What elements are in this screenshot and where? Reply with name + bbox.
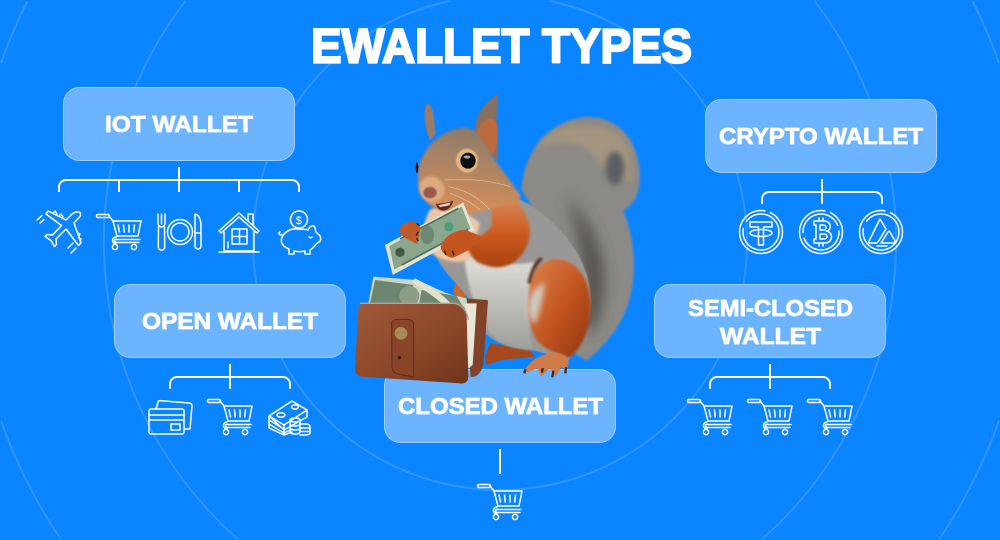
- icon: plate and cutlery: [158, 214, 201, 250]
- squirrel chest and arm: [463, 193, 530, 267]
- squirrel rear arm leg: [453, 277, 468, 303]
- squirrel hind foot: [524, 353, 568, 377]
- icon: shopping cart: [208, 400, 252, 435]
- icon: airplane: [37, 211, 81, 253]
- IoT wallet box: [64, 88, 294, 160]
- crypto wallet connector: [762, 179, 882, 204]
- illustration: squirrel with wallet: [355, 94, 640, 383]
- crypto wallet label: CRYPTO WALLET: [719, 123, 924, 149]
- squirrel body: [424, 193, 591, 360]
- IoT wallet label: IOT WALLET: [105, 111, 254, 137]
- icon: credit cards: [149, 401, 192, 434]
- icon: bitcoin coin: [800, 210, 842, 254]
- closed wallet connector: [499, 449, 501, 474]
- icon: piggy bank: $: [296, 215, 302, 227]
- icon: avalanche coin: [860, 210, 902, 254]
- squirrel paws: [399, 222, 482, 258]
- panel: closed wallet: [384, 370, 616, 520]
- semi-closed wallet connector: [710, 364, 830, 389]
- icon: shopping cart: [478, 484, 522, 520]
- icon: shopping cart: [96, 214, 141, 250]
- squirrel tail: [522, 117, 640, 361]
- panel: open wallet: [114, 284, 346, 435]
- panel: semi-closed wallet: [654, 284, 886, 435]
- squirrel head: [416, 94, 521, 213]
- panel: crypto wallet: [706, 100, 936, 254]
- icon: tether coin: [740, 210, 782, 254]
- icon: house: [219, 213, 259, 252]
- panel: IoT wallet: [37, 88, 321, 254]
- title: EWALLET TYPES: [311, 20, 692, 74]
- crypto wallet box: [706, 100, 936, 172]
- open wallet connector: [170, 364, 290, 389]
- icon: cash and coins: [269, 401, 310, 435]
- semi-closed wallet label: WALLET: [720, 323, 822, 349]
- closed wallet box: [384, 370, 616, 442]
- IoT connector: [59, 167, 299, 192]
- semi-closed wallet label: [688, 295, 853, 349]
- squirrel far leg: [485, 343, 535, 365]
- closed wallet label: CLOSED WALLET: [398, 393, 604, 419]
- banknote: [385, 202, 474, 275]
- semi-closed wallet box: [654, 284, 886, 358]
- open wallet label: OPEN WALLET: [142, 308, 319, 334]
- semi-closed wallet label: SEMI-CLOSED: [688, 295, 853, 321]
- icons: shopping carts: [688, 400, 852, 435]
- wallet: [355, 277, 488, 383]
- icon: piggy bank: [279, 211, 321, 254]
- open wallet box: [114, 284, 346, 358]
